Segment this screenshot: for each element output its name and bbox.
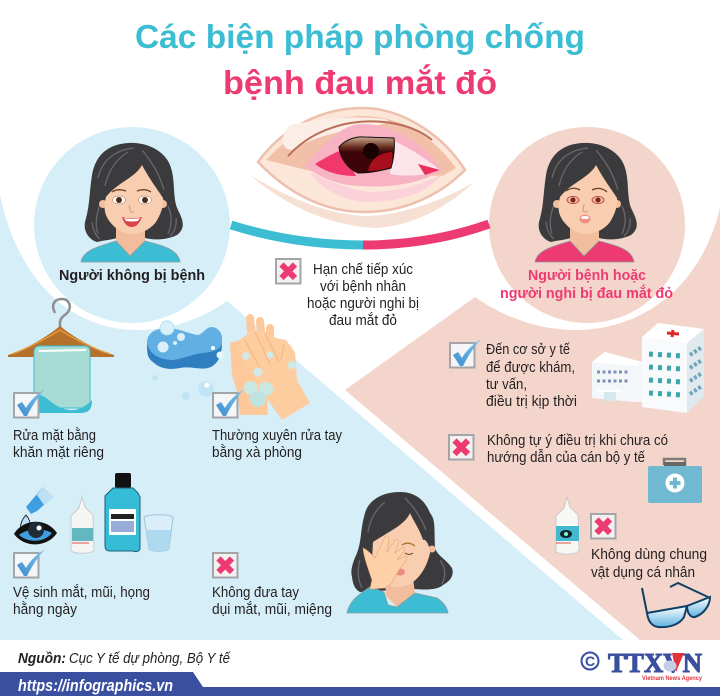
text: wash hands xyxy=(212,428,343,461)
label: sick person: Người bệnh hoặc xyxy=(528,267,646,284)
text: no self-treatment: Không tự ý điều trị khi chưa có xyxy=(487,433,668,449)
logo: TTXVN: TTXVN xyxy=(608,648,702,678)
icon: glasses xyxy=(642,583,710,627)
title xyxy=(135,18,585,101)
text: do not touch: Không đưa tay xyxy=(212,585,300,601)
text: wash face xyxy=(13,427,104,461)
icon: glass of water xyxy=(144,515,173,551)
text: limit contact: với bệnh nhân xyxy=(320,279,406,295)
icon: mouthwash bottle xyxy=(105,473,140,552)
text: do not touch xyxy=(212,585,332,618)
text: limit contact: đau mắt đỏ xyxy=(329,312,397,329)
circle: sick person background xyxy=(489,127,685,323)
icon: washing hands xyxy=(230,318,310,420)
icon: hanger and towel xyxy=(8,299,114,413)
text: go to medical facility: điều trị kịp thời xyxy=(486,394,577,410)
icon: hospital building xyxy=(592,323,704,413)
connector arc: pink xyxy=(363,224,489,245)
text: go to medical facility: tư vấn, xyxy=(486,377,527,393)
person: woman rubbing eyes xyxy=(347,492,453,613)
panel: pink area for sick people xyxy=(345,208,720,640)
person: sick woman xyxy=(535,143,637,262)
icon: check, go to hospital xyxy=(450,339,481,368)
icon: saline bottle xyxy=(71,497,94,553)
title: Các biện pháp phòng chống xyxy=(135,18,585,55)
text: no self-treatment xyxy=(487,433,668,466)
text: wash face: khăn mặt riêng xyxy=(13,445,104,461)
text: hygiene: hằng ngày xyxy=(13,601,78,618)
person: healthy woman xyxy=(81,143,183,262)
text: go to medical facility: để được khám, xyxy=(486,360,575,376)
footer bar with url: https://infographics.vn xyxy=(18,676,173,695)
circle: healthy person background xyxy=(34,127,230,323)
connector arc: teal xyxy=(231,225,363,245)
label: healthy person: Người không bị bệnh xyxy=(59,267,205,284)
text: go to medical facility xyxy=(486,342,577,410)
text: limit contact: Hạn chế tiếp xúc xyxy=(313,262,413,278)
icon: cross, limit contact xyxy=(276,259,300,284)
icon: eye drop bottle xyxy=(556,497,579,554)
text: wash hands: Thường xuyên rửa tay xyxy=(212,428,343,444)
icon: cross, do not touch xyxy=(213,553,238,578)
text: wash hands: bằng xà phòng xyxy=(212,444,302,461)
icon: check, hands xyxy=(213,389,244,418)
title: bệnh đau mắt đỏ xyxy=(223,64,497,101)
text: no self-treatment: hướng dẫn của cán bộ y tế xyxy=(487,449,645,466)
icon: soap sponge with bubbles xyxy=(147,321,224,400)
panel: blue prevention area for healthy people xyxy=(0,195,623,640)
logo: copyright mark: C xyxy=(585,653,595,669)
logo: copyright mark xyxy=(582,652,598,670)
logo: TTXVN: Vietnam News Agency xyxy=(642,675,702,682)
illustration: red eye xyxy=(250,108,474,228)
text: wash face: Rửa mặt bằng xyxy=(13,427,96,444)
footer bar with url xyxy=(0,672,720,696)
text: no sharing items: Không dùng chung xyxy=(591,547,707,563)
icon: eye drops and eye xyxy=(14,487,57,544)
text: limit contact xyxy=(307,262,419,329)
source line: Cục Y tế dự phòng, Bộ Y tế xyxy=(69,651,231,667)
text: no sharing items xyxy=(591,547,707,581)
label: sick person xyxy=(500,267,673,302)
text: hygiene: Vệ sinh mắt, mũi, họng xyxy=(13,584,150,601)
label: sick person: người nghi bị đau mắt đỏ xyxy=(500,284,673,302)
text: hygiene xyxy=(13,584,150,618)
source line: Nguồn: xyxy=(18,651,66,667)
icon: cross, no sharing xyxy=(591,514,616,538)
icon: cross, no self-treatment xyxy=(449,435,474,460)
text: do not touch: dụi mắt, mũi, miệng xyxy=(212,601,332,618)
icon: check, hygiene xyxy=(14,549,45,578)
text: no sharing items: vật dụng cá nhân xyxy=(591,565,695,581)
icon: check, towel xyxy=(14,389,45,418)
icon: first aid kit xyxy=(648,459,702,503)
text: go to medical facility: Đến cơ sở y tế xyxy=(486,342,570,358)
text: limit contact: hoặc người nghi bị xyxy=(307,296,419,312)
